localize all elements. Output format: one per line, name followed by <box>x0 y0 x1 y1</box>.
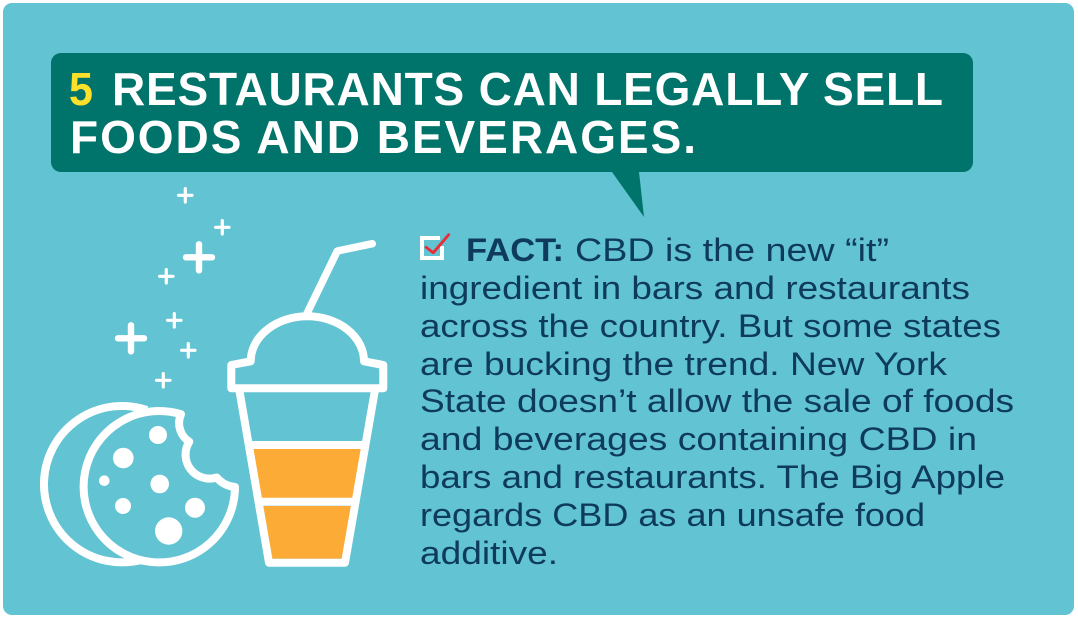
cookie chips <box>99 426 205 545</box>
banner speech bubble <box>51 53 973 217</box>
fact text block <box>420 232 1014 571</box>
heading line 2: FOODS AND BEVERAGES. <box>70 111 696 163</box>
straw <box>307 244 372 314</box>
lid <box>231 316 383 388</box>
fact line 8: regards CBD as an unsafe food <box>420 497 925 533</box>
heading number: 5 <box>69 63 93 115</box>
fact line 2: ingredient in bars and restaurants <box>420 270 970 306</box>
fact line 3: across the country. But some states <box>420 308 1001 344</box>
fact line 1: CBD is the new “it” <box>575 232 889 268</box>
heading line 1: RESTAURANTS CAN LEGALLY SELL <box>112 63 943 115</box>
fact label: FACT: <box>466 232 564 268</box>
icon: drink cup <box>231 244 383 563</box>
cup outline <box>239 390 375 563</box>
fact line 7: bars and restaurants. The Big Apple <box>420 459 1005 495</box>
fact line 5: State doesn’t allow the sale of foods <box>420 383 1014 419</box>
front bitten cookie <box>84 411 235 562</box>
fact line 6: and beverages containing CBD in <box>420 421 977 457</box>
icon: sparkles <box>118 189 229 387</box>
back cookie <box>44 406 147 562</box>
icon: cookies <box>44 406 235 562</box>
fact line 4: are bucking the trend. New York <box>420 346 948 382</box>
heading banner <box>51 53 973 217</box>
fact line 9: additive. <box>420 535 558 571</box>
icon: checkbox <box>422 235 449 258</box>
orange drink layers <box>253 449 361 559</box>
